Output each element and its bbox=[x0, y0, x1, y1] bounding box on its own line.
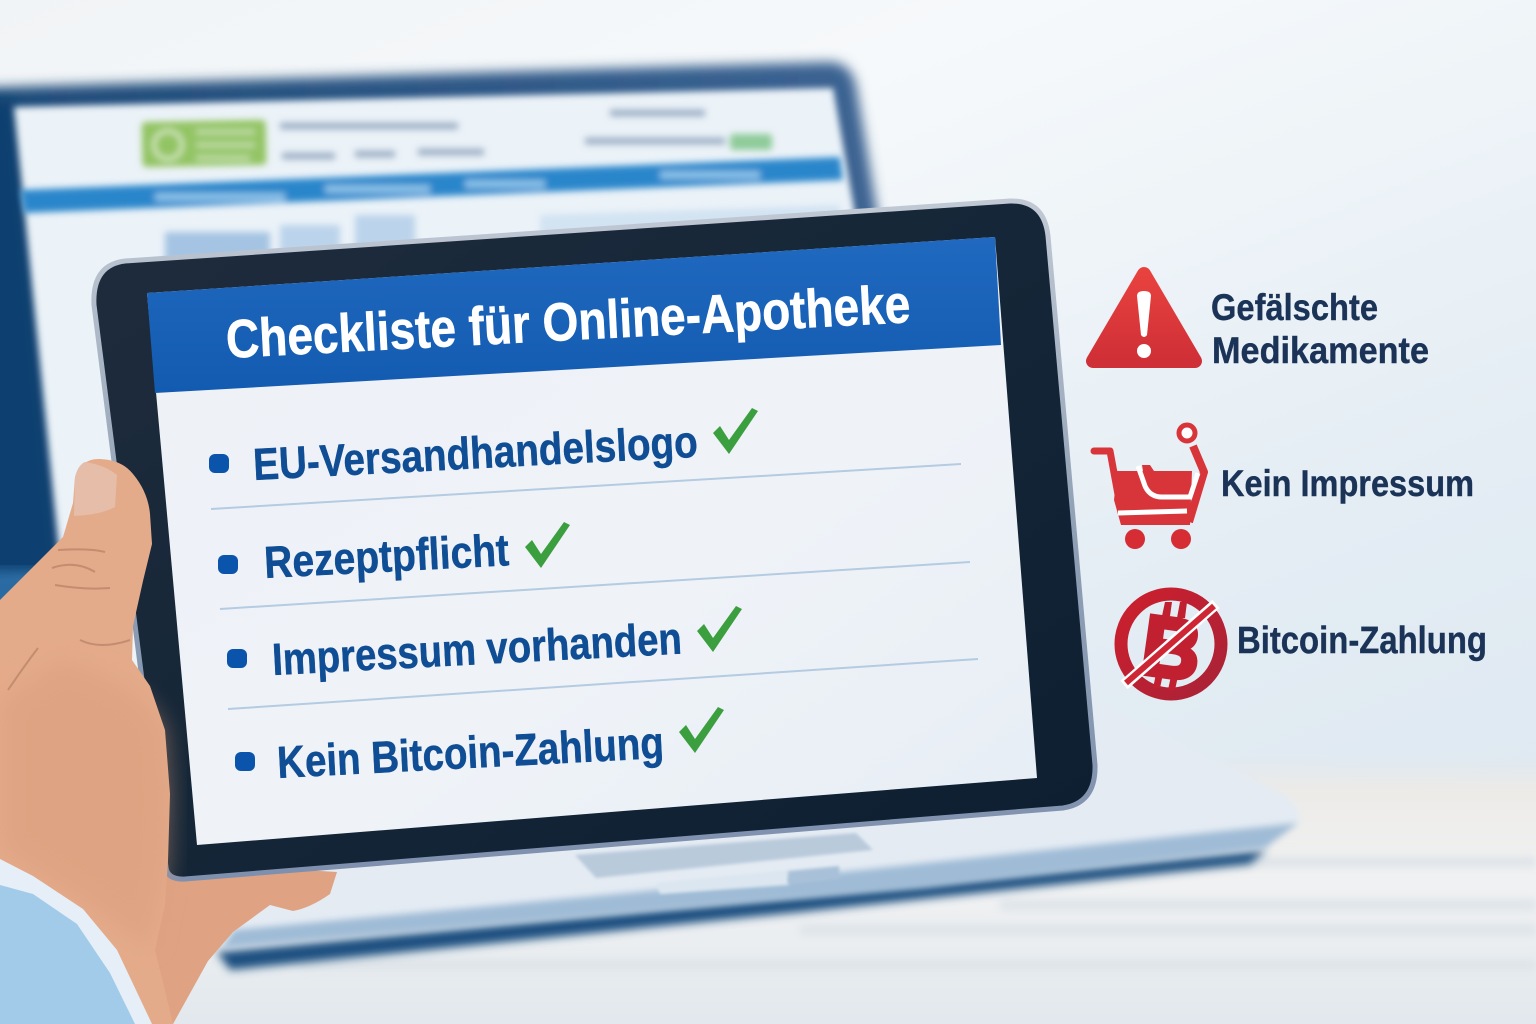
warning: Bitcoin-Zahlung: Bitcoin-Zahlung bbox=[1237, 620, 1487, 662]
website header blurred bbox=[20, 113, 843, 280]
tablet bbox=[94, 201, 1095, 879]
hand: thumb and palm bbox=[0, 459, 173, 1024]
warning: Kein Impressum bbox=[1094, 425, 1474, 549]
title bar bbox=[147, 237, 1001, 393]
hand: fingers behind tablet bbox=[100, 860, 337, 1024]
warning: Gefälschte Medikamente: Gefälschte bbox=[1211, 287, 1378, 328]
laptop lid and screen bbox=[0, 62, 885, 620]
icon: warning triangle bbox=[1093, 274, 1195, 361]
icon: crossed-out bitcoin: B bbox=[1136, 597, 1207, 699]
tablet frame bbox=[94, 201, 1095, 879]
blurred laptop in background bbox=[0, 62, 1300, 970]
warning: Bitcoin-Zahlung bbox=[1121, 594, 1487, 699]
warning: Gefälschte Medikamente: Medikamente bbox=[1212, 330, 1429, 371]
title: Checkliste für Online-Apotheke bbox=[224, 274, 912, 370]
shirt sleeve and cuff bbox=[0, 859, 152, 1024]
checklist item: Impressum vorhanden: Impressum vorhanden bbox=[271, 613, 683, 685]
icon: shopping cart bbox=[1094, 425, 1204, 549]
checklist item: Kein Bitcoin-Zahlung: Kein Bitcoin-Zahlung bbox=[276, 717, 665, 788]
tablet screen bbox=[147, 237, 1037, 845]
checklist item: Rezeptpflicht: Rezeptpflicht bbox=[263, 524, 510, 588]
checklist item: EU-Versandhandelslogo: EU-Versandhandelslogo bbox=[252, 416, 699, 490]
warning: Gefälschte Medikamente bbox=[1093, 274, 1429, 371]
skin creases bbox=[8, 549, 130, 690]
thumbnail bbox=[74, 462, 117, 516]
warning: Kein Impressum: Kein Impressum bbox=[1221, 463, 1474, 504]
laptop base bbox=[200, 698, 1300, 970]
